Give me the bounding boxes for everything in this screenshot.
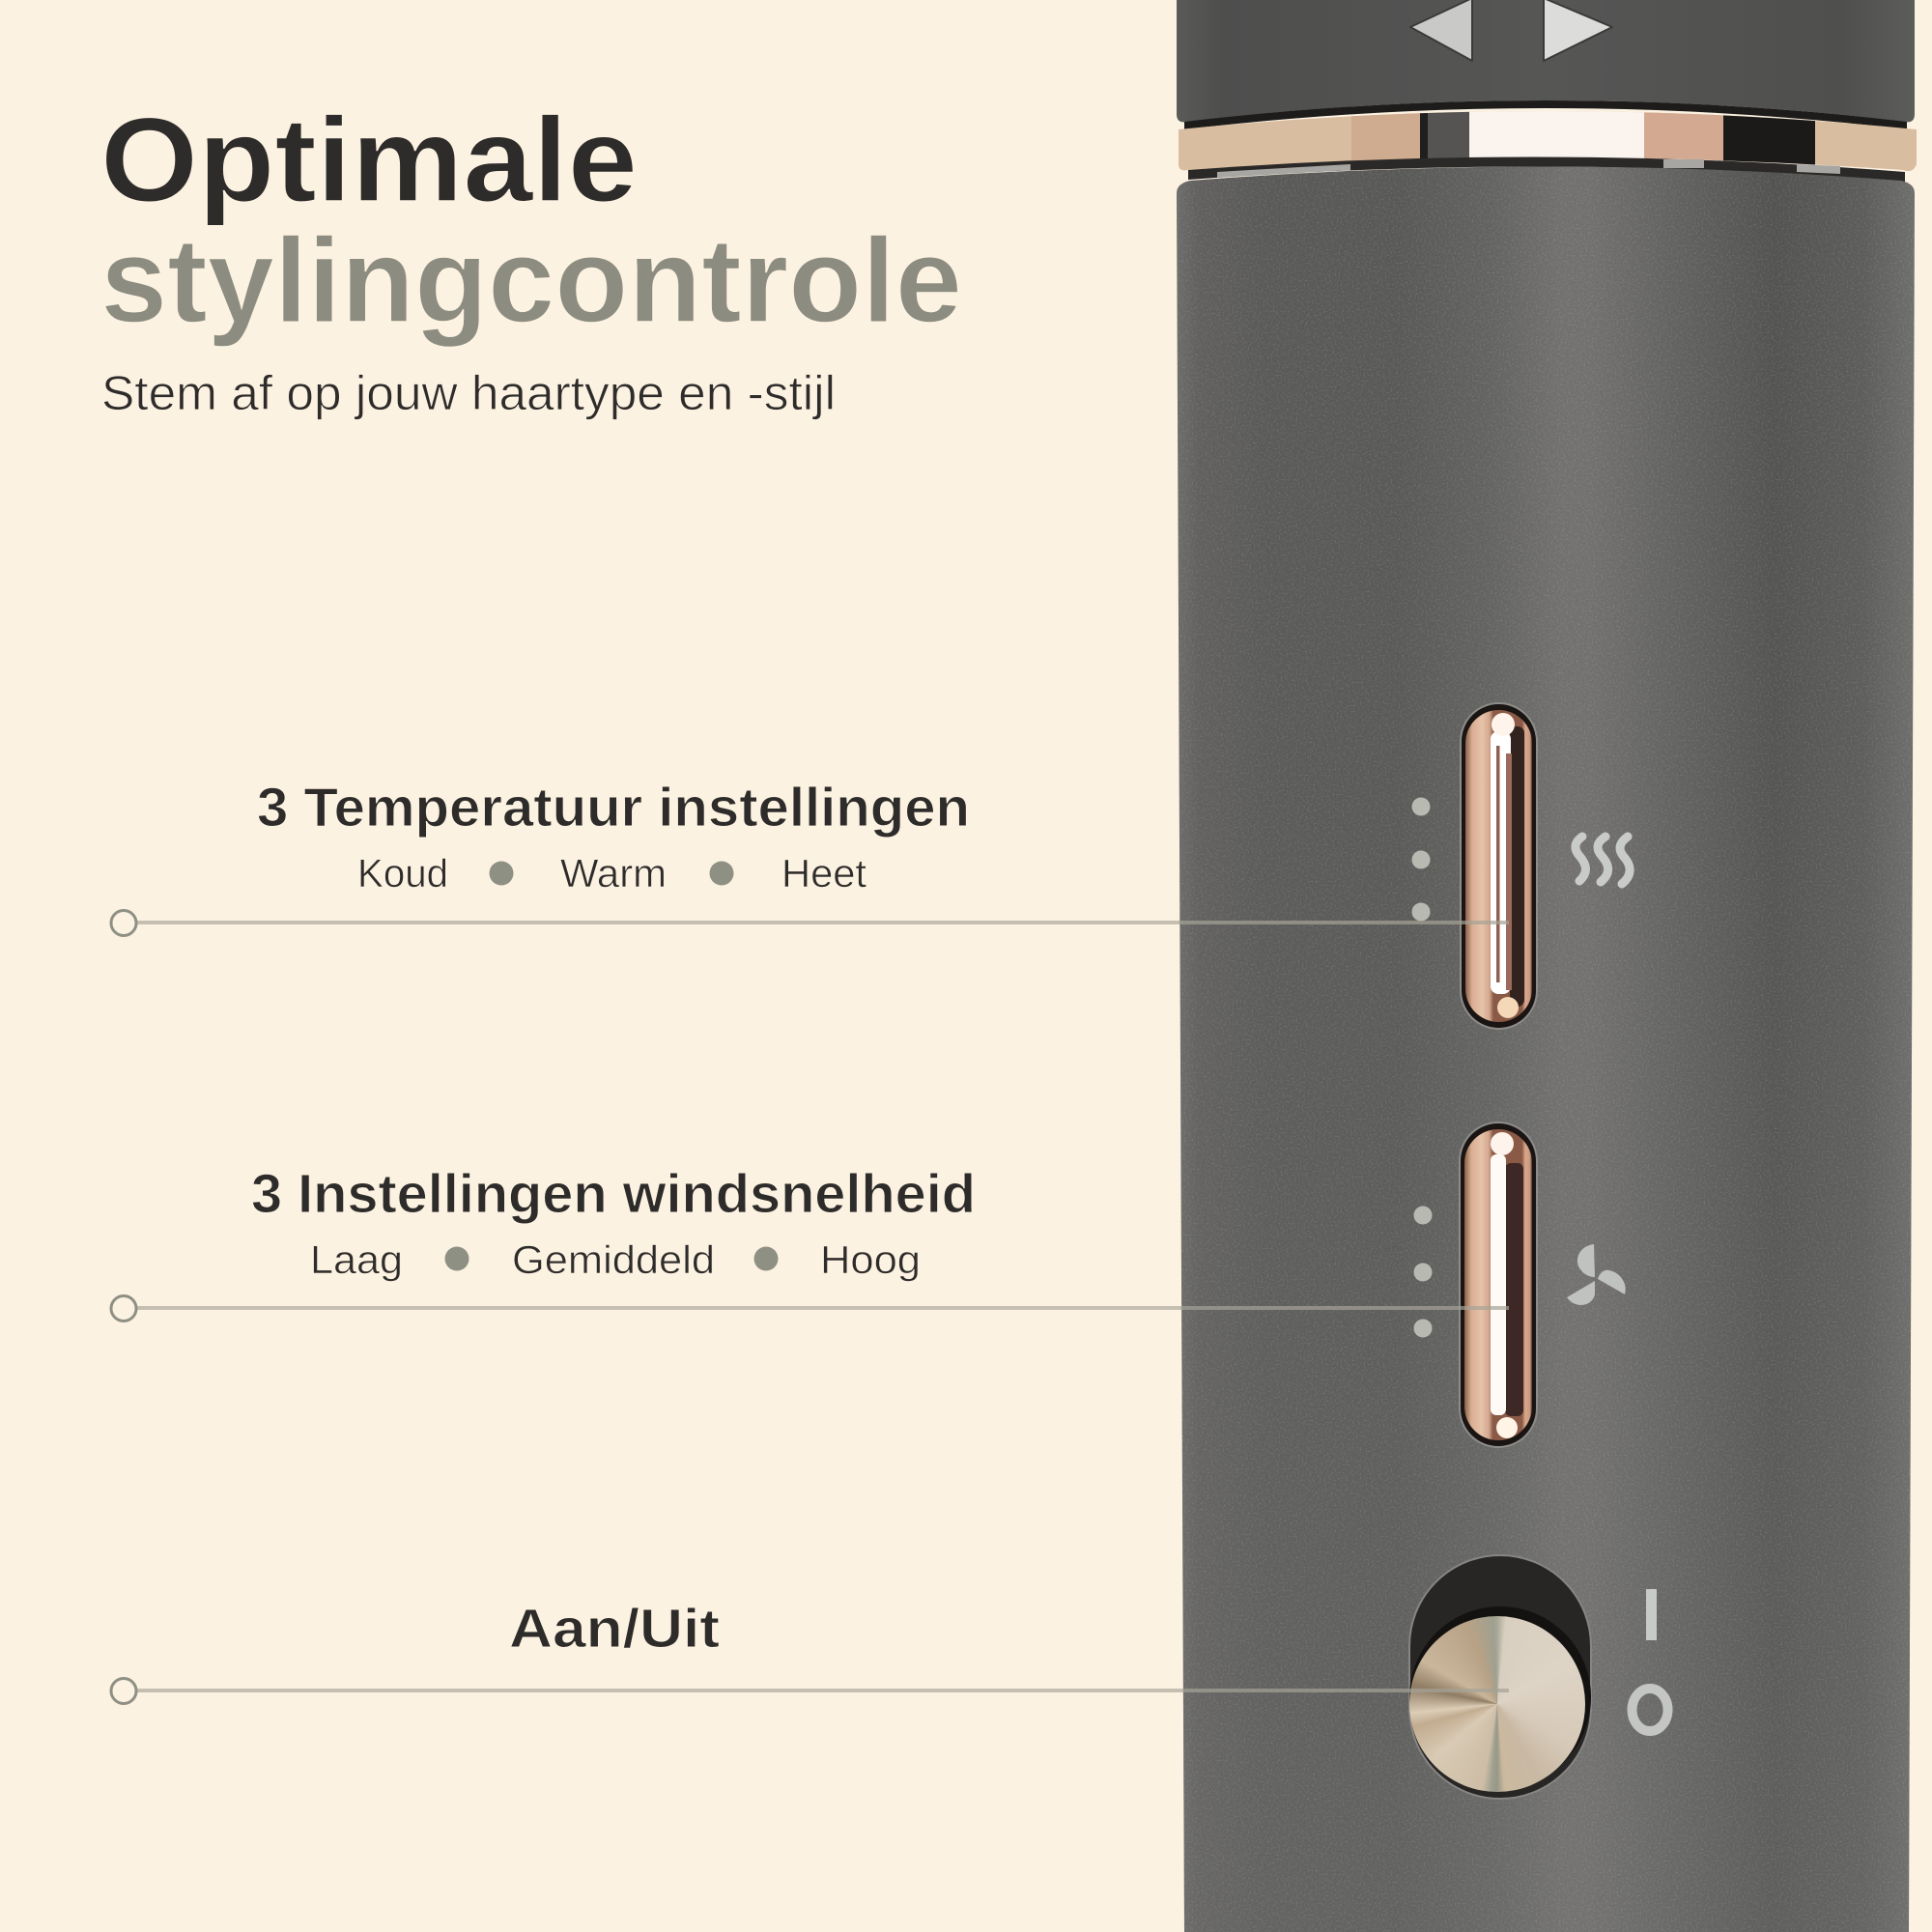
options: wind speed: Laag [310, 1237, 403, 1282]
title [100, 94, 962, 348]
callout: wind speed settings [111, 1163, 1509, 1321]
callout: power [111, 1598, 1509, 1704]
icon: fan [1567, 1244, 1626, 1305]
leader line: temperature [111, 910, 1509, 935]
wind speed level dots [1414, 1206, 1432, 1337]
icon: direction triangles [1410, 0, 1612, 61]
options: temperature [357, 851, 867, 895]
subtitle: Stem af op jouw haartype en -stijl [101, 366, 836, 420]
title: Optimale [100, 94, 638, 227]
temperature level dots [1412, 798, 1430, 922]
rose gold ring [1179, 111, 1917, 182]
leader line: power [111, 1679, 1509, 1704]
callout: temperature settings [111, 777, 1509, 935]
icon: on mark [1646, 1589, 1657, 1640]
options: temperature: Koud [357, 851, 448, 895]
power switch knob [1409, 1555, 1591, 1799]
options: wind speed: Hoog [820, 1237, 921, 1282]
heading: power: Aan/Uit [509, 1598, 720, 1660]
temperature slider [1461, 703, 1537, 1029]
product: hair dryer handle [1177, 0, 1920, 1932]
icon: heat waves [1576, 837, 1630, 884]
icon: off mark [1633, 1689, 1667, 1731]
main body [1177, 155, 1915, 1932]
heading: wind speed: 3 Instellingen windsnelheid [251, 1163, 976, 1225]
options: temperature: Warm [560, 851, 667, 895]
leader line: wind speed [111, 1296, 1509, 1321]
options: temperature: Heet [781, 851, 867, 895]
heading: temperature: 3 Temperatuur instellingen [257, 777, 970, 838]
wind speed slider [1460, 1122, 1537, 1447]
options: wind speed [310, 1237, 921, 1282]
title: stylingcontrole [100, 214, 962, 348]
options: wind speed: Gemiddeld [512, 1237, 715, 1282]
upper collar [1177, 0, 1915, 129]
